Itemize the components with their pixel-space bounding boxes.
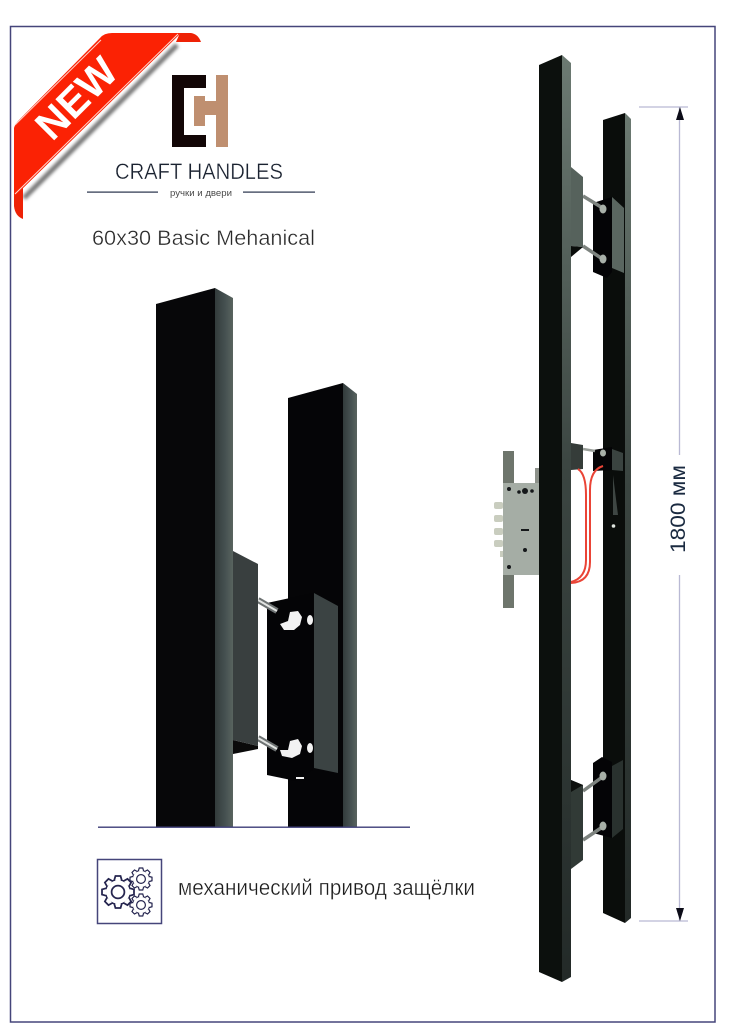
front bar: [156, 288, 233, 827]
front bar: [539, 55, 571, 982]
rear bar: [603, 113, 631, 923]
mounting rods: [258, 600, 277, 749]
product title: 60x30 Basic Mehanical: [92, 227, 315, 250]
mortise lock: [494, 451, 539, 608]
black mounting plate: [267, 593, 313, 781]
logo mark: CH: [172, 75, 228, 147]
bolts: [280, 611, 313, 779]
dimension label: 1800 мм: [667, 465, 690, 553]
feature icon: gears: [98, 860, 162, 924]
tagline: ручки и двери: [170, 188, 232, 199]
dimension: 1800 mm: [639, 107, 690, 921]
bottom bracket: [571, 757, 623, 869]
top bracket: [571, 167, 624, 278]
feature label: механический привод защёлки: [178, 875, 475, 900]
red cables: [571, 466, 603, 583]
ribbon: NEW: [14, 33, 201, 219]
front bracket: [233, 551, 258, 754]
middle bracket: [571, 443, 623, 528]
full-height handle illustration: [494, 55, 631, 982]
ribbon label: NEW: [26, 48, 127, 149]
arrowheads: [676, 107, 684, 921]
ground line: [98, 826, 410, 828]
brand name: CRAFT HANDLES: [115, 159, 283, 184]
close-up handle illustration: [156, 288, 357, 827]
plate fin: [314, 593, 338, 773]
rear bar: [288, 383, 357, 827]
